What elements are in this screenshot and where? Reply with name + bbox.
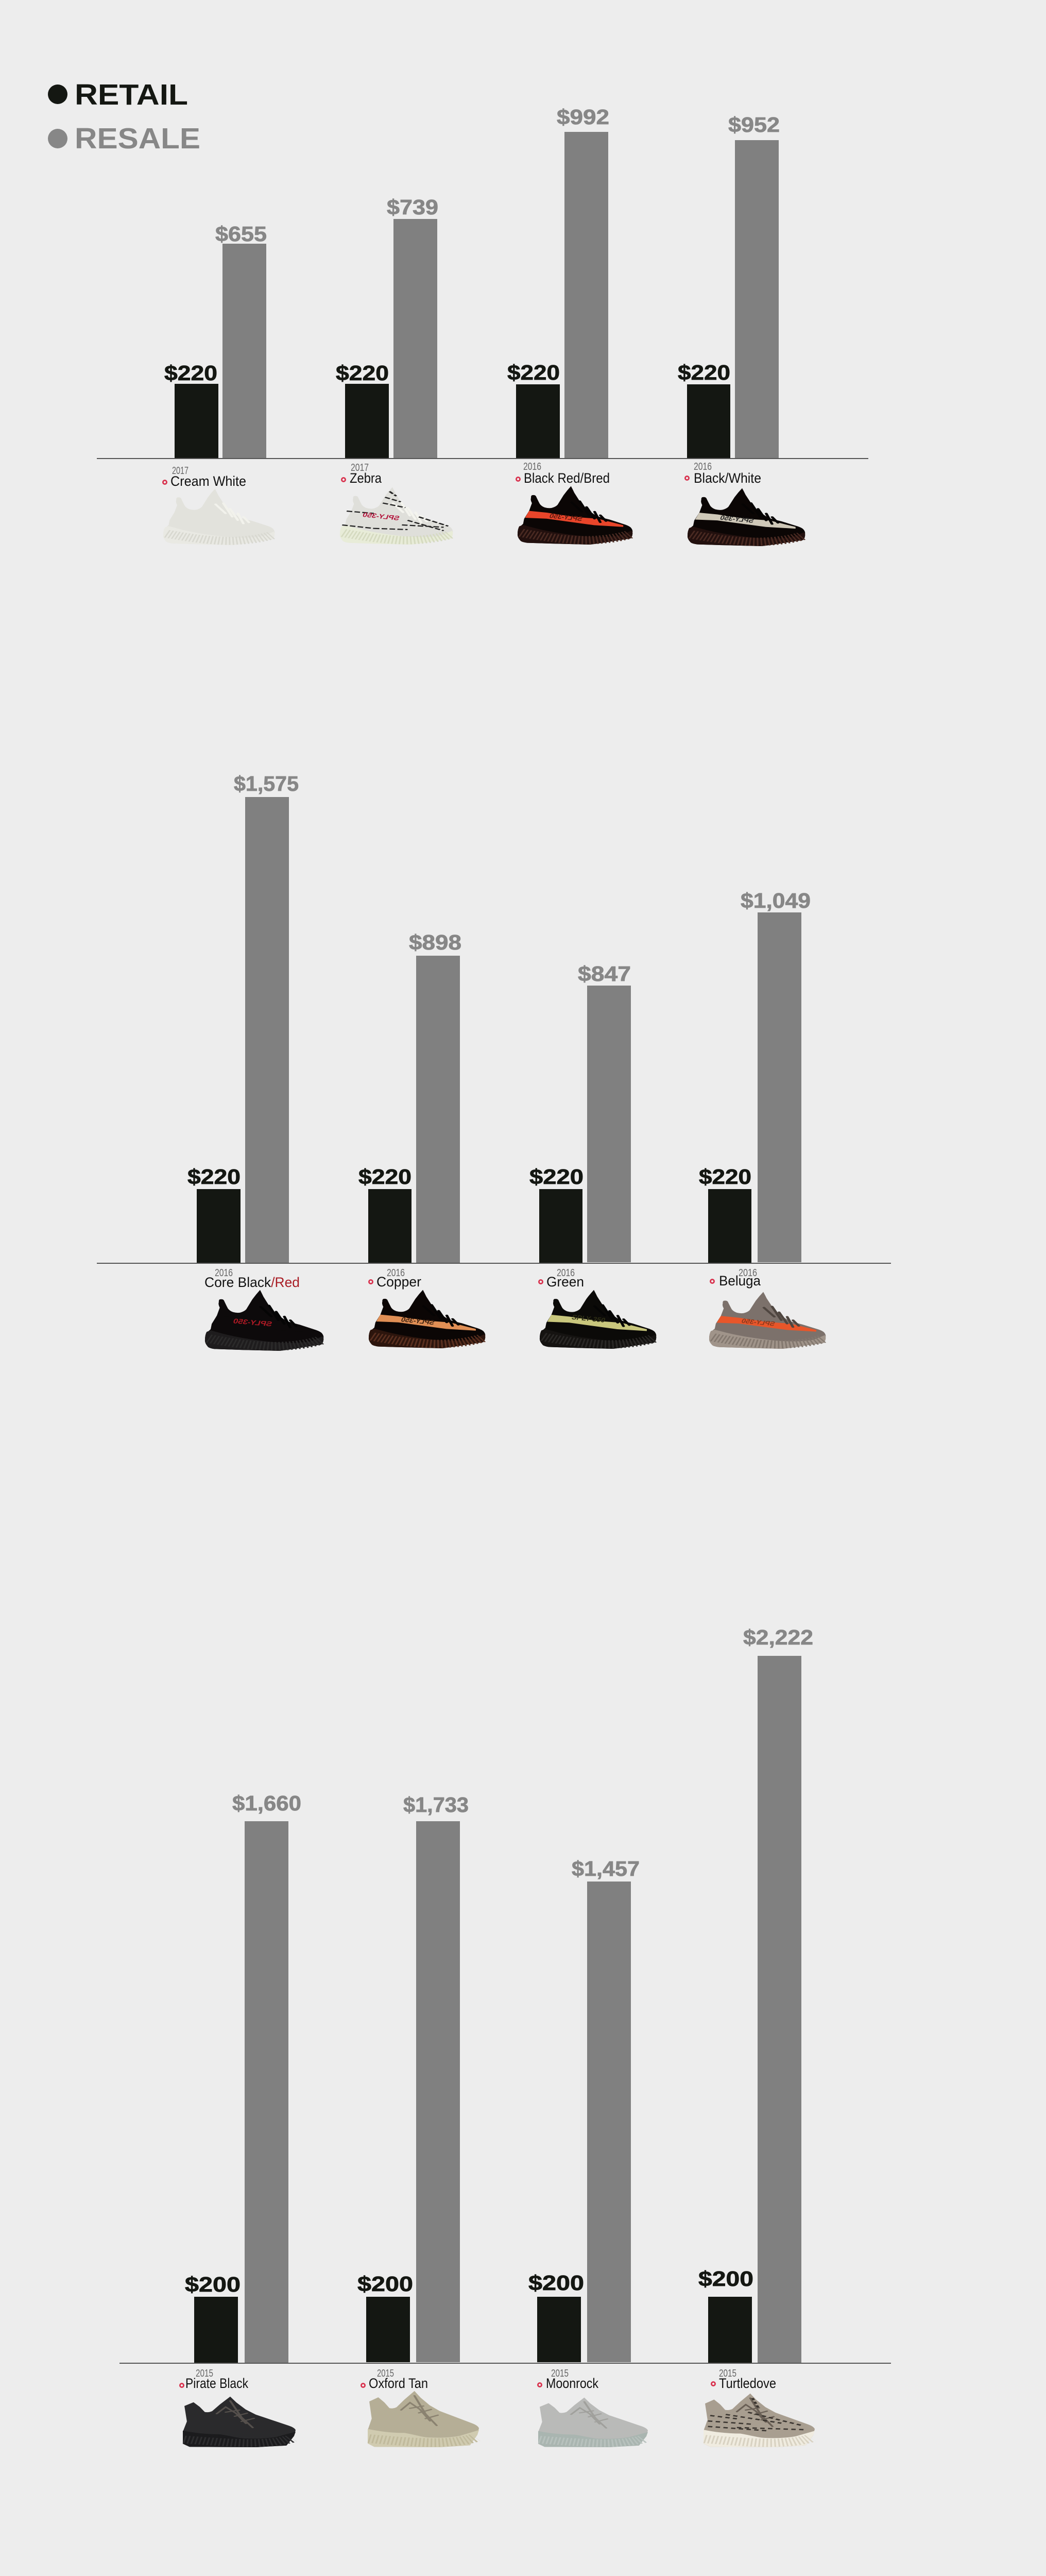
legend: resale: RESALE [75, 122, 200, 155]
icon: zebra sneaker [340, 487, 453, 545]
item: Pirate Black: $1,660 [232, 1791, 301, 1815]
icon: green sneaker: SPLY-350 [571, 1314, 606, 1324]
item: Core Black/Red: $220 [187, 1165, 241, 1189]
icon: black white sneaker: SPLY-350 [719, 514, 755, 524]
icon: cream white sneaker [163, 489, 275, 545]
icon: zebra sneaker: SPLY-350 [362, 512, 401, 522]
item: Pirate Black [180, 1791, 301, 2447]
item: Core Black/Red: $1,575 [234, 772, 299, 795]
item: Green: $847 [578, 962, 631, 986]
item: Cream White: $220 [164, 361, 217, 385]
item: Cream White: Cream White [170, 473, 246, 489]
icon: copper sneaker [369, 1290, 485, 1348]
chart panel: Yeezy Boost 350 2015, retail $200 [119, 1625, 891, 2447]
item: Turtledove: Turtledove [719, 2376, 776, 2391]
item: Green [529, 962, 656, 1349]
item: Zebra: Zebra [350, 470, 382, 486]
item: Green: 2016 [557, 1267, 575, 1279]
item: Moonrock: 2015 [551, 2368, 569, 2379]
item: Black/White: $952 [728, 113, 780, 137]
item: Black/White [678, 113, 805, 546]
item: Black Red/Bred: 2016 [523, 461, 541, 472]
item: Core Black/Red: 2016 [215, 1267, 233, 1279]
item: Beluga: $220 [699, 1165, 751, 1189]
item: Black/White: Black/White [694, 470, 761, 486]
item: Beluga [699, 889, 826, 1349]
item: Copper: Copper [376, 1274, 421, 1290]
item: Oxford Tan: Oxford Tan [369, 2376, 428, 2391]
icon: turtledove sneaker [704, 2394, 815, 2447]
item: Oxford Tan [357, 1793, 479, 2447]
item: Black Red/Bred: Black Red/Bred [524, 470, 610, 486]
icon: oxford tan sneaker [368, 2391, 479, 2447]
item: Green: $220 [529, 1165, 584, 1189]
item: Black/White: 2016 [694, 461, 712, 472]
icon: copper sneaker: SPLY-350 [400, 1316, 436, 1327]
item: Turtledove: $200 [698, 2267, 753, 2291]
icon: core black sneaker [205, 1290, 323, 1351]
icon: beluga sneaker: SPLY-350 [740, 1317, 776, 1328]
item: Zebra: $220 [336, 361, 389, 385]
item: Zebra: 2017 [351, 462, 369, 473]
item: Zebra: $739 [387, 195, 438, 219]
item: Green: Green [546, 1274, 584, 1290]
item: Copper: 2016 [387, 1267, 405, 1279]
item: Turtledove [698, 1625, 815, 2447]
item: Cream White: 2017 [172, 465, 188, 477]
item: Oxford Tan: 2015 [377, 2368, 394, 2379]
icon: beluga sneaker [709, 1292, 826, 1349]
icon: core black sneaker: SPLY-350 [232, 1317, 273, 1328]
item: Oxford Tan: $1,733 [403, 1793, 469, 1817]
item: Core Black/Red: Core Black/Red [204, 1275, 300, 1290]
icon: black red sneaker: SPLY-350 [548, 512, 584, 523]
icon: black white sneaker [688, 488, 805, 546]
item: Pirate Black: Pirate Black [185, 2376, 248, 2391]
item: Copper: $220 [358, 1165, 411, 1189]
item: Black Red/Bred [507, 105, 632, 545]
icon: pirate black sneaker [183, 2397, 296, 2447]
item: Pirate Black: $200 [185, 2273, 241, 2296]
item: Moonrock: $1,457 [572, 1857, 640, 1880]
item: Cream White [163, 222, 275, 545]
item: Beluga: 2016 [739, 1267, 757, 1279]
item: Turtledove: $2,222 [743, 1625, 813, 1649]
icon: black red sneaker [518, 486, 632, 545]
item: Copper [358, 930, 485, 1348]
item: Moonrock: Moonrock [546, 2376, 598, 2391]
item: Zebra [336, 195, 453, 545]
item: Beluga: Beluga [719, 1273, 761, 1289]
chart panel: Yeezy Boost 350 V2 2017-2016, retail $220 [97, 105, 868, 546]
chart panel: Yeezy Boost 350 V2 2016, retail $220 [97, 772, 891, 1351]
item: Moonrock [528, 1857, 648, 2447]
legend: retail: RETAIL [75, 78, 188, 111]
item: Black Red/Bred: $220 [507, 361, 560, 384]
item: Core Black/Red [187, 772, 323, 1351]
item: Oxford Tan: $200 [357, 2272, 413, 2296]
item: Moonrock: $200 [528, 2271, 584, 2295]
item: Beluga: $1,049 [741, 889, 811, 912]
icon: moonrock sneaker [538, 2398, 648, 2447]
item: Copper: $898 [409, 930, 461, 954]
item: Black/White: $220 [678, 361, 730, 384]
item: Black Red/Bred: $992 [557, 105, 609, 129]
item: Cream White: $655 [215, 222, 267, 246]
item: Pirate Black: 2015 [196, 2368, 213, 2379]
icon: green sneaker [540, 1290, 656, 1349]
item: Turtledove: 2015 [719, 2368, 736, 2379]
legend [48, 78, 200, 155]
